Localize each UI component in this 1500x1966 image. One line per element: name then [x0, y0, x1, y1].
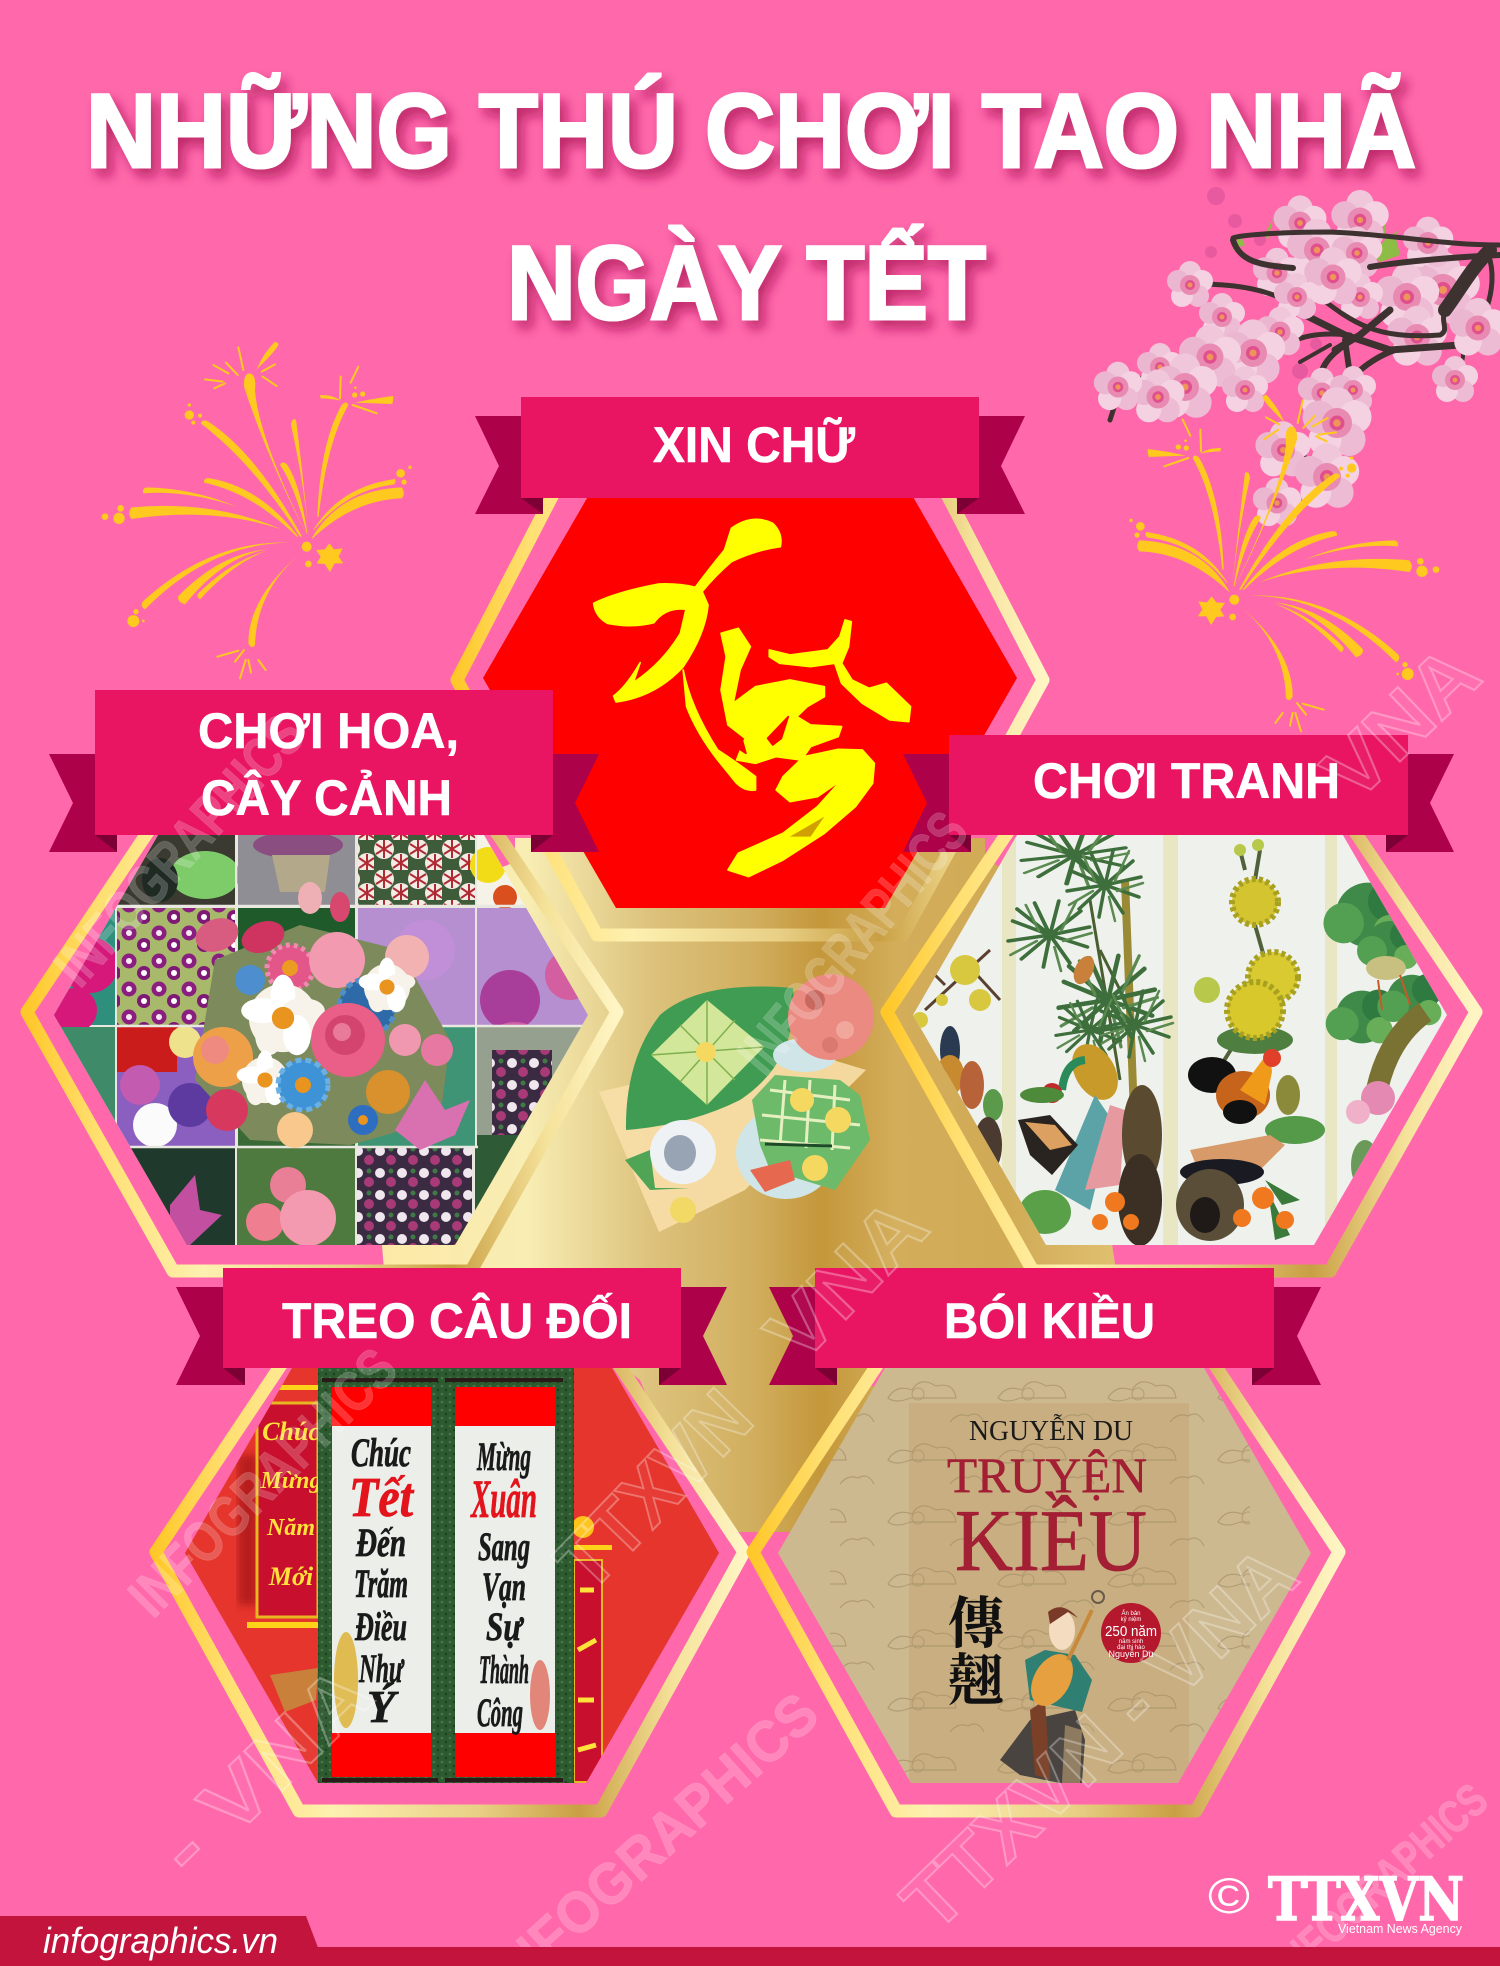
- scroll left: Như: [358, 1646, 405, 1691]
- panel: calligraphy character on red hexagon: [483, 448, 1017, 908]
- icon: firework right: [1129, 395, 1439, 731]
- square cake: [651, 1000, 764, 1105]
- book author and title: TRUYỆN: [947, 1447, 1147, 1503]
- panel: paintings: [913, 835, 1447, 1245]
- panel: flower collage: [54, 835, 588, 1245]
- scroll left: Điều: [354, 1604, 407, 1649]
- label: XIN CHỮ: [653, 416, 855, 473]
- title: [86, 72, 1416, 342]
- watermarks: INFOGRAPHICS: [725, 799, 981, 1086]
- ribbon: CHƠI HOA, CÂY CẢNH: [49, 690, 599, 852]
- flower bouquet: [191, 882, 470, 1150]
- book author and title: KIỀU: [955, 1491, 1147, 1590]
- footer tag with website: infographics.vn: [43, 1920, 278, 1961]
- pink flower bowl: [773, 974, 874, 1072]
- frame: couplets hexagon: [156, 1293, 744, 1811]
- logo: TTXVN: Vietnam News Agency: [1338, 1921, 1462, 1936]
- frame: paintings hexagon: [887, 753, 1476, 1271]
- badge: 250 years: Nguyễn Du: [1108, 1649, 1154, 1659]
- label: CHƠI HOA,: [198, 703, 459, 759]
- illustration: woman with lute: [1000, 1591, 1104, 1783]
- frame: flowers hexagon: [27, 753, 617, 1271]
- red banner right: [572, 1516, 612, 1782]
- badge: 250 years: Ấn bản: [1121, 1610, 1141, 1617]
- ribbon: TREO CÂU ĐỐI: [176, 1268, 727, 1385]
- frame: Kieu hexagon: [753, 1293, 1339, 1811]
- painting: apricot and peacocks: [912, 950, 1003, 1173]
- logo: TTXVN: TTXVN: [1268, 1865, 1464, 1935]
- ribbon: XIN CHỮ: [475, 397, 1025, 514]
- icon: yellow calligraphy: [594, 519, 910, 877]
- frame: calligraphy hexagon: [457, 425, 1043, 935]
- scroll left: Ý: [367, 1681, 399, 1732]
- logo: TTXVN: ©: [1208, 1868, 1250, 1924]
- icon: firework left: [102, 342, 412, 678]
- red banner left: Năm: [266, 1515, 315, 1541]
- painting: pine and cranes: [1323, 881, 1444, 1190]
- scroll left: Đến: [355, 1520, 406, 1565]
- red banner left: [238, 1385, 322, 1628]
- red banner left: Mừng: [259, 1468, 322, 1494]
- watermarks: VNA: [1305, 628, 1496, 817]
- label: BÓI KIỀU: [944, 1293, 1155, 1349]
- Chinese title: [949, 1595, 1004, 1706]
- label: CÂY CẢNH: [201, 770, 452, 826]
- scroll right: [445, 1378, 563, 1782]
- painting: bamboo and peacock: [1008, 824, 1173, 1246]
- banana leaf: [626, 987, 794, 1130]
- book author and title: [948, 1414, 1146, 1572]
- scroll left: [322, 1378, 438, 1782]
- plate with green cake: [736, 1075, 870, 1199]
- red banner left: Mới: [268, 1562, 314, 1591]
- title: NHỮNG THÚ CHƠI TAO NHÃ: [86, 72, 1416, 190]
- scroll right: Sang: [478, 1524, 530, 1569]
- panel: Truyen Kieu book cover: [778, 1368, 1311, 1783]
- scroll left: Tết: [349, 1467, 414, 1529]
- ribbon: CHƠI TRANH: [903, 735, 1454, 852]
- scroll left: Chúc: [351, 1430, 411, 1475]
- green backing: [318, 1368, 574, 1783]
- label: [198, 703, 459, 826]
- ribbon: BÓI KIỀU: [769, 1268, 1321, 1385]
- scroll right: Sự: [486, 1604, 524, 1649]
- watermarks: INFOGRAPHICS: [116, 1336, 410, 1629]
- watermarks: INFOGRAPHICS: [41, 703, 317, 999]
- central gold backdrop: [382, 838, 1116, 1532]
- icon: cherry blossom branch: [1094, 187, 1500, 526]
- label: CHƠI TRANH: [1033, 753, 1340, 809]
- footer tag with website: [0, 1916, 325, 1966]
- scroll right: Xuân: [470, 1469, 537, 1529]
- logo: TTXVN: [1208, 1865, 1464, 1936]
- watermarks: VNA: [748, 1180, 944, 1379]
- illustration: Tet food tray: [599, 974, 874, 1232]
- Chinese title: 翹: [948, 1637, 1004, 1717]
- watermarks: TTXVN - VNA: [885, 1529, 1314, 1947]
- badge: 250 years: [1101, 1603, 1161, 1663]
- scroll left: Trăm: [354, 1561, 408, 1606]
- scroll right: Thành: [479, 1647, 529, 1692]
- panel: couplets: [185, 1368, 719, 1783]
- scroll right: Mừng: [476, 1434, 531, 1479]
- badge: 250 years: đại thi hào: [1117, 1645, 1146, 1651]
- label: TREO CÂU ĐỐI: [282, 1292, 632, 1349]
- teapot: [625, 1120, 716, 1223]
- watermarks: [41, 628, 1497, 1966]
- footer strip: [0, 1947, 1500, 1966]
- title: NGÀY TẾT: [507, 224, 986, 342]
- scroll right: Vạn: [482, 1564, 526, 1609]
- badge: 250 years: 250 năm: [1105, 1623, 1157, 1640]
- watermarks: - VNA: [140, 1648, 389, 1892]
- scroll right: Công: [477, 1690, 523, 1735]
- painting: chrysanthemums and rooster: [1176, 839, 1325, 1241]
- Chinese title: 傳: [948, 1580, 1004, 1660]
- red banner left: Chúc: [262, 1417, 320, 1446]
- book author and title: NGUYỄN DU: [969, 1414, 1133, 1447]
- watermarks: TTXVN: [538, 1372, 769, 1607]
- badge: 250 years: kỷ niệm: [1121, 1616, 1141, 1623]
- badge: 250 years: năm sinh: [1119, 1639, 1143, 1645]
